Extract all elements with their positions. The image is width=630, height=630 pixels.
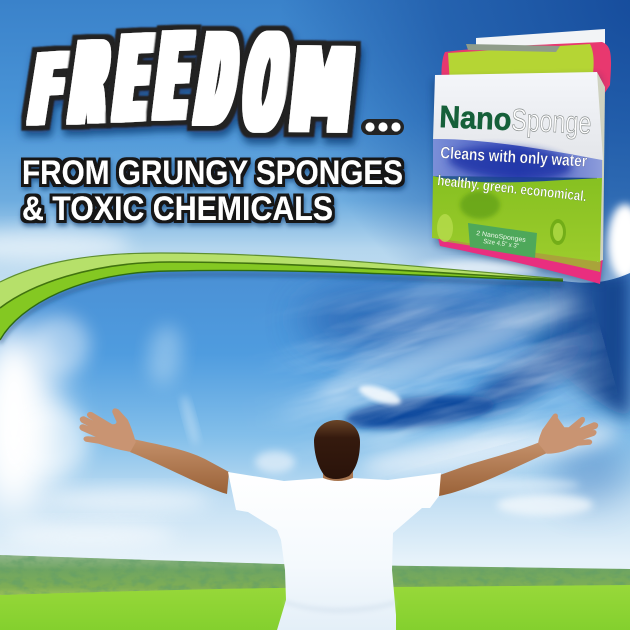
tagline: healthy green economical: healthy. green. economical. bbox=[437, 173, 587, 205]
tagline: cleans with only water: Cleans with only water bbox=[440, 144, 588, 171]
grey tab bbox=[466, 44, 560, 52]
title: FREEDOM...: R bbox=[63, 19, 117, 150]
logo bbox=[439, 99, 592, 141]
head and hair bbox=[314, 420, 360, 479]
title: FREEDOM...: D bbox=[188, 9, 246, 154]
green swoosh bbox=[0, 253, 563, 340]
box side bbox=[597, 72, 605, 262]
subtitle: FROM GRUNGY SPONGES bbox=[22, 154, 403, 192]
left arm bbox=[130, 439, 229, 494]
box blue band bbox=[433, 139, 602, 178]
green sponge back bbox=[448, 44, 594, 85]
right deep blue bbox=[494, 273, 630, 427]
right hand bbox=[539, 414, 597, 453]
box label bbox=[468, 223, 537, 258]
title: FREEDOM...: E bbox=[148, 8, 198, 148]
subtitle bbox=[22, 154, 403, 228]
label text: 2 NanoSponges bbox=[476, 230, 527, 244]
lower sky photo bbox=[0, 271, 630, 569]
logo: Sponge bbox=[511, 102, 592, 141]
white t-shirt bbox=[228, 472, 441, 630]
wave shadow bbox=[0, 274, 563, 343]
right cirrus clouds bbox=[313, 281, 587, 419]
green field bbox=[0, 585, 630, 630]
neck bbox=[323, 465, 353, 483]
product package: NanoSponge bbox=[432, 29, 611, 285]
box green front bbox=[432, 176, 602, 262]
subtitle: & TOXIC CHEMICALS bbox=[22, 190, 333, 228]
shirt folds bbox=[284, 600, 396, 613]
title: FREEDOM... bbox=[23, 8, 359, 161]
right arm bbox=[439, 442, 547, 496]
left bright clouds bbox=[0, 325, 59, 515]
logo: Nano bbox=[439, 99, 512, 137]
pink sponge back bbox=[441, 42, 611, 100]
title: FREEDOM...: M bbox=[285, 24, 359, 158]
box drop shadow bbox=[433, 76, 602, 285]
title: FREEDOM...: E bbox=[108, 12, 158, 149]
wispy cloud texture bbox=[277, 276, 615, 450]
person with raised arms bbox=[80, 409, 597, 630]
pink sponge bottom bbox=[438, 238, 603, 284]
horizon tree line bbox=[0, 555, 630, 598]
upper sky background bbox=[0, 0, 630, 345]
ellipsis dots bbox=[361, 119, 404, 135]
box white front bbox=[433, 72, 603, 160]
insert card bbox=[476, 29, 605, 80]
product package: NanoSponge: Size 4.5" x 3" bbox=[483, 238, 520, 250]
left hand bbox=[80, 409, 135, 451]
title: FREEDOM...: F bbox=[23, 34, 72, 147]
title: FREEDOM...: O bbox=[236, 10, 296, 161]
